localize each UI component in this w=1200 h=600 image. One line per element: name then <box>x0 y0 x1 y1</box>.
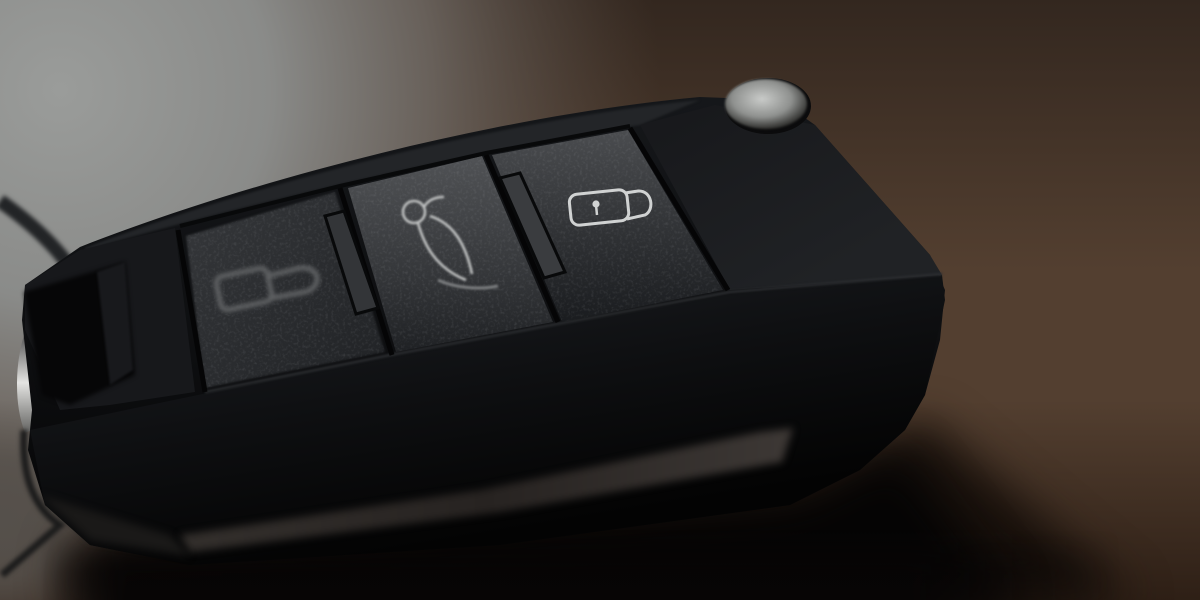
left end section <box>25 228 195 410</box>
key fob body <box>22 78 945 565</box>
left button <box>186 192 385 388</box>
icon: padlock on right button <box>569 189 651 226</box>
metal pin <box>725 78 811 134</box>
lower seam highlight <box>205 274 942 392</box>
button speckle <box>180 125 730 395</box>
lower shell <box>30 275 945 565</box>
icon: unlocked car symbol on left button <box>215 267 317 311</box>
left end slot <box>24 262 135 405</box>
icon: car silhouette on middle button <box>403 197 498 288</box>
key ring <box>0 201 108 575</box>
rocker separators <box>325 211 378 314</box>
middle button <box>348 156 553 352</box>
metal strip along the bottom <box>180 428 793 552</box>
shadow under the key <box>40 420 1135 600</box>
top groove line <box>180 126 630 226</box>
right button <box>492 130 723 322</box>
right panel <box>640 105 942 290</box>
button grooves <box>178 128 728 392</box>
top rim band <box>85 100 700 250</box>
